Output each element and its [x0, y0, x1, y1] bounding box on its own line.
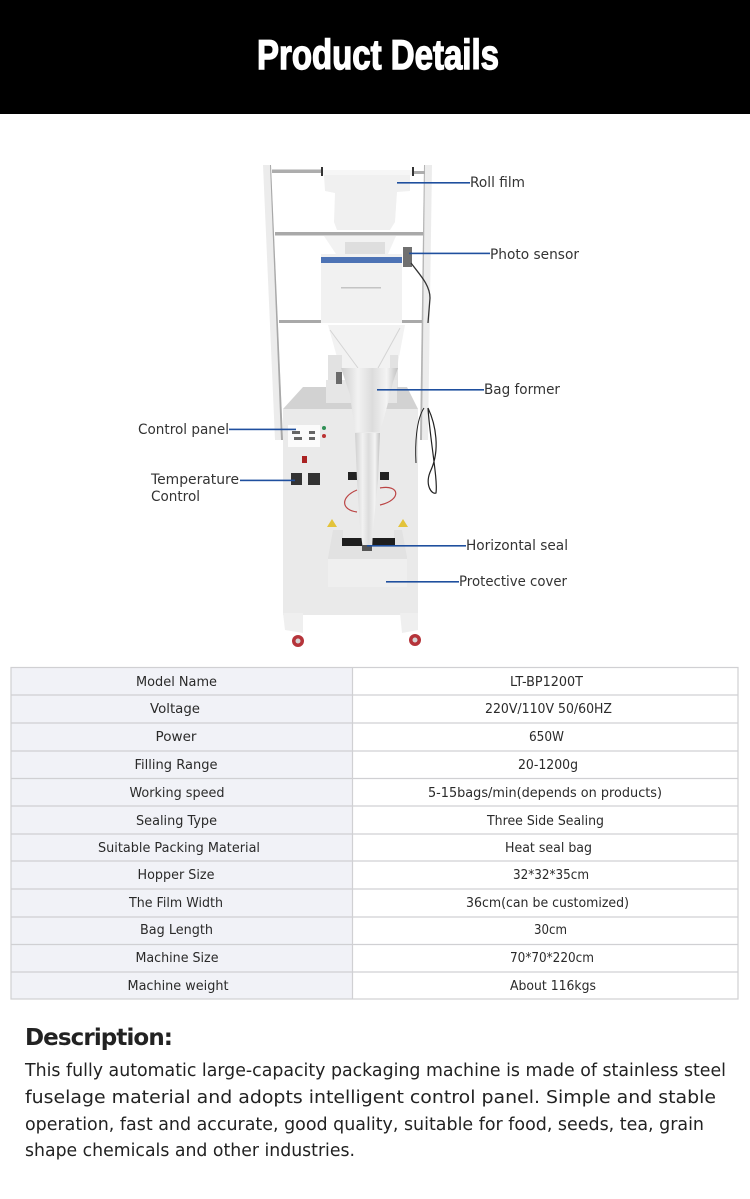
table row: voltage [150, 702, 612, 717]
description text: fuselage material and adopts intelligent control panel. Simple and stable [25, 1088, 716, 1108]
table row: model name [136, 675, 583, 690]
header banner [0, 0, 750, 114]
table row: machine weight: Machine weight [128, 979, 228, 994]
table row: packing material: Heat seal bag [505, 841, 592, 856]
table row: voltage: Voltage [150, 702, 200, 717]
cabinet [283, 355, 421, 647]
table row: machine size: 70*70*220cm [510, 951, 594, 966]
table row: bag length: Bag Length [140, 923, 213, 938]
callout: roll film: Roll film [470, 175, 525, 191]
title: Product Details [257, 31, 499, 78]
table row: power: Power [156, 730, 197, 745]
table row: voltage: 220V/110V 50/60HZ [485, 702, 612, 717]
table row: model name: LT-BP1200T [510, 675, 583, 690]
heating wires and brackets [345, 472, 396, 512]
description text: shape chemicals and other industries. [25, 1141, 355, 1161]
table row: power: 650W [529, 730, 564, 745]
table row: packing material: Suitable Packing Material [98, 841, 260, 856]
power cables [416, 408, 436, 493]
table row: working speed: 5-15bags/min(depends on products) [428, 786, 662, 801]
table row: film width [128, 896, 629, 911]
callout: photo sensor: Photo sensor [490, 247, 579, 263]
callout: temperature control: Temperature [150, 472, 239, 488]
table row: hopper size [138, 868, 589, 883]
table row: film width: 36cm(can be customized) [466, 896, 629, 911]
temperature controllers [291, 473, 320, 485]
table row: film width: The Film Width [128, 896, 223, 911]
table row: filling range: 20-1200g [518, 758, 578, 773]
machine frame uprights [263, 165, 432, 440]
table row: machine size: Machine Size [136, 951, 218, 966]
callout: bag former: Bag former [484, 382, 560, 398]
table row: working speed [130, 786, 662, 801]
description heading: Description: [25, 1025, 173, 1051]
table row: machine weight [128, 979, 596, 994]
table row: sealing type: Sealing Type [136, 814, 217, 829]
machine illustration [263, 165, 436, 647]
control panel [288, 425, 326, 463]
table row: filling range: Filling Range [134, 758, 218, 773]
table row: sealing type [136, 814, 604, 829]
table row: working speed: Working speed [130, 786, 224, 801]
table left column background [11, 668, 352, 999]
table row: power [156, 730, 564, 745]
photo sensor and cable [403, 247, 430, 323]
forming tube [341, 368, 398, 551]
description text: This fully automatic large-capacity packaging machine is made of stainless steel [24, 1061, 726, 1081]
table row: bag length: 30cm [534, 923, 567, 938]
table grid [11, 667, 738, 999]
roll film and bag [321, 170, 412, 368]
table row: model name: Model Name [136, 675, 217, 690]
description text: operation, fast and accurate, good quality, suitable for food, seeds, tea, grain [25, 1115, 704, 1135]
table row: sealing type: Three Side Sealing [486, 814, 604, 829]
callout: roll film [397, 175, 525, 191]
table row: bag length [140, 923, 567, 938]
table row: machine weight: About 116kgs [510, 979, 596, 994]
protective cover and sealer [328, 530, 407, 587]
table row: packing material [98, 841, 592, 856]
table row: filling range [134, 758, 578, 773]
callout: horizontal seal: Horizontal seal [466, 538, 568, 554]
description text [24, 1061, 726, 1161]
table row: hopper size: 32*32*35cm [513, 868, 589, 883]
callout: control panel: Control panel [138, 422, 229, 438]
callout: temperature control: Control [151, 489, 200, 505]
table row: machine size [136, 951, 594, 966]
callout: temperature control [150, 472, 295, 505]
table row: hopper size: Hopper Size [138, 868, 214, 883]
warning signs [327, 519, 408, 527]
callout: protective cover: Protective cover [459, 574, 567, 590]
specification table [11, 667, 738, 999]
